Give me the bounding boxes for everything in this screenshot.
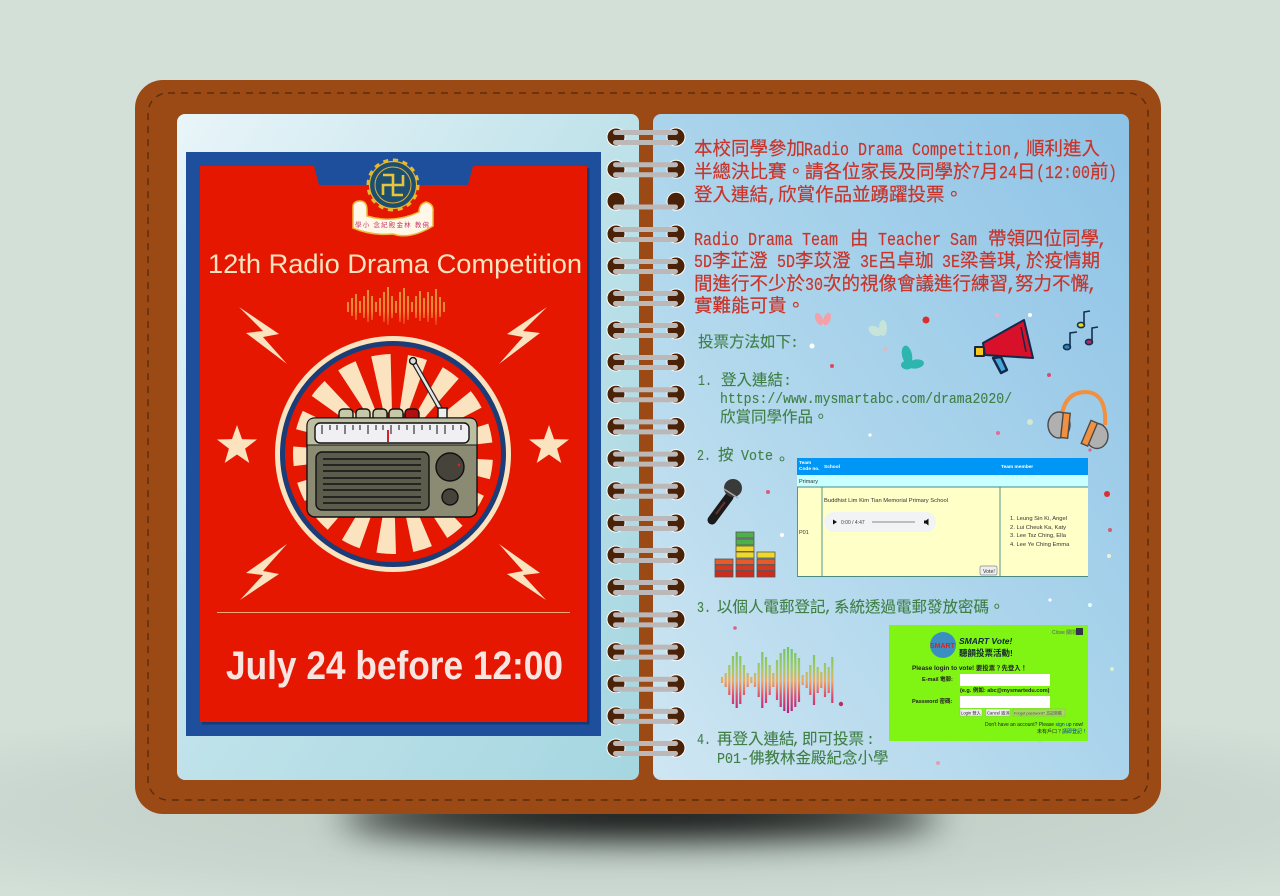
login panel screenshot: Forgot password? 忘記密碼 <box>1014 710 1062 716</box>
team paragraph: 5D <box>694 253 712 273</box>
intro paragraph: 登入連結 <box>694 185 768 207</box>
intro paragraph: 順利進入 <box>1026 139 1100 161</box>
login panel screenshot: Login 登入 <box>961 710 982 716</box>
voting table screenshot: 0:00 / 4:47 <box>841 520 865 526</box>
login panel screenshot: Close 關閉 <box>1052 630 1076 636</box>
voting table screenshot <box>797 458 1088 577</box>
login panel screenshot: E-mail 電郵: <box>922 675 953 683</box>
step 1 <box>698 371 1012 427</box>
intro paragraph: Radio Drama Competition <box>804 141 1011 161</box>
intro paragraph: 本校同學參加 <box>694 139 805 161</box>
deadline: July 24 before 12:00 <box>226 644 563 688</box>
voting table screenshot: 4. Lee Ye Ching Emma <box>1010 542 1070 548</box>
step 3: 3. <box>697 600 711 617</box>
intro paragraph: , <box>1012 141 1023 161</box>
team paragraph: 次的視像會議進行練習 <box>823 274 1008 296</box>
step 1: 1. <box>698 373 712 390</box>
step 1: https://www.mysmartabc.com/drama2020/ <box>720 391 1012 408</box>
icon: microphone <box>712 479 742 520</box>
intro paragraph: ) <box>1108 164 1117 184</box>
login panel screenshot: 聽韻投票活動! <box>959 648 1013 658</box>
step 1: 登入連結 <box>721 371 783 390</box>
spiral binding rings <box>607 128 685 757</box>
icon: headphones <box>1048 392 1108 448</box>
team paragraph: 李芷澄 <box>712 251 768 273</box>
team paragraph: Radio Drama Team <box>694 231 838 251</box>
team paragraph: 30 <box>805 276 823 296</box>
left page <box>177 114 639 780</box>
step 3: , <box>824 600 833 617</box>
icon: equalizer <box>715 532 775 577</box>
poster red sheet <box>200 166 587 722</box>
icon: music notes <box>1064 311 1098 350</box>
step 1: : <box>783 373 792 390</box>
voting instructions heading: 投票方法如下 <box>698 333 791 352</box>
voting table screenshot: P01 <box>799 530 809 536</box>
team paragraph: 間進行不少於 <box>694 274 805 296</box>
team paragraph: 3E <box>860 253 878 273</box>
school logo <box>353 160 433 236</box>
team paragraph: , <box>1006 276 1017 296</box>
voting instructions heading: : <box>790 335 799 352</box>
step 4: 即可投票 <box>802 730 864 749</box>
team paragraph: , <box>1014 253 1025 273</box>
team paragraph: 3E <box>942 253 960 273</box>
team paragraph: , <box>1097 231 1108 251</box>
step 4: , <box>792 732 801 749</box>
intro paragraph: 前 <box>1090 162 1109 184</box>
team paragraph: Teacher Sam <box>878 231 977 251</box>
voting table screenshot: Buddhist Lim Kim Tian Memorial Primary School <box>824 498 948 504</box>
sunburst badge <box>275 336 511 572</box>
step 2: 按 <box>718 446 734 465</box>
team paragraph: , <box>1087 276 1098 296</box>
step 4: 4. <box>697 732 711 749</box>
voting table screenshot: Code no. <box>799 466 820 472</box>
school logo: 學小 念紀殿金林 教佛 <box>355 220 430 229</box>
poster shadow <box>202 168 590 724</box>
team paragraph <box>694 229 1108 318</box>
voting table screenshot: Team member <box>1001 464 1033 470</box>
login panel screenshot: Cancel 取消 <box>987 710 1010 716</box>
step 2: 。 <box>779 447 795 465</box>
butterflies <box>813 312 925 370</box>
step 4: P01- <box>717 751 749 768</box>
team paragraph: 於疫情期 <box>1026 251 1100 273</box>
poster title: 12th Radio Drama Competition <box>208 249 582 279</box>
login panel screenshot: SMART Vote! <box>959 636 1013 646</box>
right page <box>653 114 1129 780</box>
step 2: Vote <box>741 448 773 465</box>
poster sound wave <box>348 287 444 325</box>
poster <box>186 152 601 736</box>
poster blue backing <box>186 152 601 736</box>
voting table screenshot: 2. Lui Cheuk Ka, Katy <box>1010 525 1066 531</box>
intro paragraph: (12:00 <box>1036 164 1090 184</box>
icon: megaphone <box>975 320 1033 373</box>
intro paragraph: 24 <box>999 164 1017 184</box>
stars <box>217 425 569 463</box>
intro paragraph <box>694 139 1117 207</box>
login panel screenshot <box>889 625 1088 741</box>
step 4: 佛教林金殿紀念小學 <box>749 748 889 768</box>
step 4 <box>697 730 889 768</box>
team paragraph: 實難能可貴。 <box>694 296 805 318</box>
team paragraph: 由 <box>850 229 869 251</box>
leather notebook cover <box>135 80 1161 814</box>
step 3: 系統透過電郵發放密碼。 <box>834 598 1005 617</box>
intro paragraph: 半總決比賽。請各位家長及同學於 <box>694 162 972 184</box>
voting table screenshot: Primary <box>799 479 818 485</box>
intro paragraph: , <box>767 187 778 207</box>
team paragraph: 呂卓珈 <box>878 251 934 273</box>
radio <box>307 358 477 517</box>
login panel screenshot: (e.g. 例如: abc@mysmartedu.com) <box>960 686 1050 694</box>
login panel screenshot: 未有戶口？請即登記！ <box>1037 728 1087 735</box>
voting table screenshot: 3. Lee Tsz Ching, Ella <box>1010 533 1067 539</box>
step 4: : <box>866 732 875 749</box>
team paragraph: 梁善琪 <box>960 251 1016 273</box>
step 1: 欣賞同學作品。 <box>720 407 829 427</box>
voting table screenshot: School <box>824 464 840 470</box>
login panel screenshot: SMART <box>930 643 956 650</box>
poster divider <box>217 612 570 614</box>
lightning bolts <box>239 307 547 600</box>
voting table screenshot: 1. Leung Sin Ki, Angel <box>1010 516 1067 522</box>
voting table screenshot: Team <box>799 460 811 466</box>
intro paragraph: 月 <box>980 163 999 184</box>
team paragraph: 李苡澄 <box>795 251 851 273</box>
step 3: 以個人電郵登記 <box>717 598 826 617</box>
team paragraph: 努力不懈 <box>1015 274 1089 296</box>
login panel screenshot: Don't have an account? Please sign up now! <box>985 722 1084 728</box>
login panel screenshot: Please login to vote! 要投票？先登入！ <box>912 663 1027 672</box>
voting table screenshot: Vote! <box>983 569 995 575</box>
sound wave icon <box>722 647 832 713</box>
step 2: 2. <box>697 448 711 465</box>
intro paragraph: 7 <box>971 164 980 184</box>
intro paragraph: 欣賞作品並踴躍投票。 <box>778 185 963 207</box>
team paragraph: 5D <box>777 253 795 273</box>
team paragraph: 帶領四位同學 <box>988 229 1099 251</box>
login panel screenshot: Password 密碼: <box>912 697 953 705</box>
step 4: 再登入連結 <box>717 730 795 749</box>
decorative confetti dots <box>733 313 1114 765</box>
intro paragraph: 日 <box>1017 163 1036 184</box>
